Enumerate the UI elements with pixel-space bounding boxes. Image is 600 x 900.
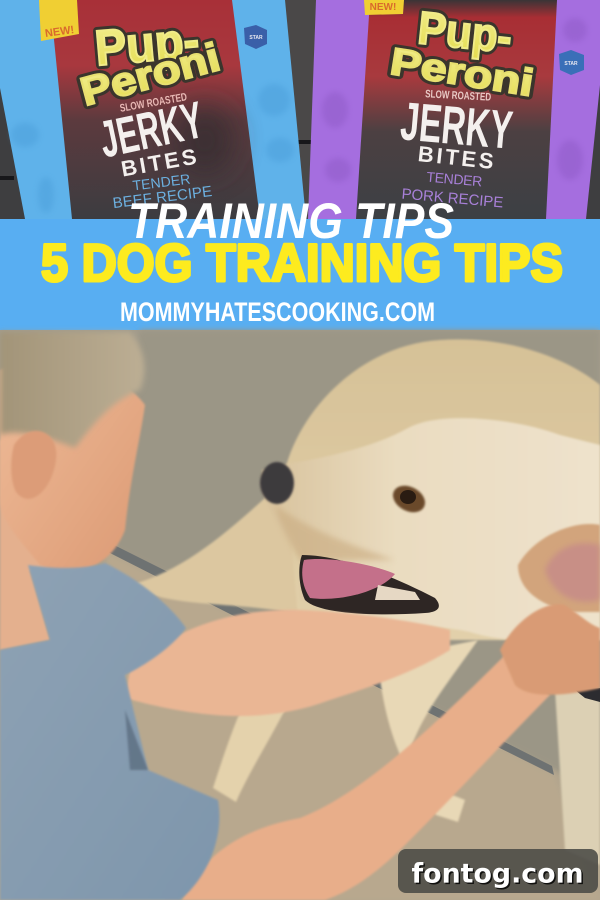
logo: Pup-	[416, 1, 514, 63]
muzzle shade	[275, 505, 395, 560]
dog back leg	[213, 700, 290, 802]
bag text: JERKY	[398, 91, 515, 161]
badge: STAR	[249, 35, 263, 41]
tongue	[302, 559, 395, 599]
new badge	[39, 0, 79, 41]
mouth	[299, 555, 439, 614]
ear	[11, 431, 56, 499]
new badge	[364, 0, 404, 15]
neck and head	[0, 440, 100, 650]
dog tail	[130, 480, 310, 615]
bag text	[95, 91, 213, 212]
blue title band	[0, 219, 600, 330]
main heading block	[41, 193, 563, 327]
dog head	[262, 418, 600, 641]
purple bag	[308, 0, 600, 219]
logo: Peroni	[76, 35, 225, 115]
website: MOMMYHATESCOOKING.COM	[120, 297, 435, 327]
ear	[518, 524, 600, 612]
arm lower	[182, 655, 550, 900]
bag text: SLOW ROASTED	[425, 88, 491, 104]
logo: Pup-	[416, 1, 514, 63]
bag text: PORK RECIPE	[401, 186, 504, 211]
hair	[0, 332, 144, 448]
collar	[575, 688, 600, 702]
right leg	[555, 690, 600, 865]
bag text: BEEF RECIPE	[112, 183, 213, 212]
yellow heading: 5 DOG TRAINING TIPS	[41, 234, 563, 293]
badge: STAR	[564, 61, 578, 67]
ground	[0, 330, 600, 900]
dog body	[285, 339, 600, 640]
lower photo: boy and dog	[0, 330, 600, 900]
arm upper	[125, 610, 450, 716]
new badge: NEW!	[44, 24, 75, 40]
blue bag	[0, 0, 306, 219]
logo: Peroni	[387, 41, 536, 105]
badge	[244, 25, 267, 49]
sleeve shadow	[125, 710, 148, 770]
dog front leg	[378, 640, 478, 822]
logo	[387, 1, 536, 105]
watermark	[398, 849, 598, 893]
watermark: fontog.com	[412, 858, 584, 890]
logo: Pup-	[93, 12, 201, 76]
bag text: BITES	[119, 144, 198, 182]
new badge: NEW!	[370, 2, 396, 13]
bag text: SLOW ROASTED	[119, 91, 188, 115]
boy	[0, 332, 600, 900]
bag text	[398, 88, 515, 211]
bag text: TENDER	[132, 171, 191, 194]
dog	[130, 339, 600, 865]
bag text: TENDER	[426, 169, 483, 189]
brush heading: TRAINING TIPS	[128, 193, 454, 249]
nose	[260, 462, 294, 504]
shirt	[0, 563, 219, 900]
logo	[76, 12, 225, 115]
hand	[500, 604, 600, 695]
badge	[559, 50, 584, 75]
watermark: fontog.com	[413, 860, 585, 891]
bag text: JERKY	[95, 91, 208, 170]
logo: Pup-	[93, 12, 201, 76]
top photo: jerky bags on dark wood	[0, 0, 600, 219]
logo: Peroni	[387, 41, 536, 105]
eye	[388, 480, 430, 518]
logo: Peroni	[76, 35, 225, 115]
bag text: BITES	[417, 141, 495, 174]
